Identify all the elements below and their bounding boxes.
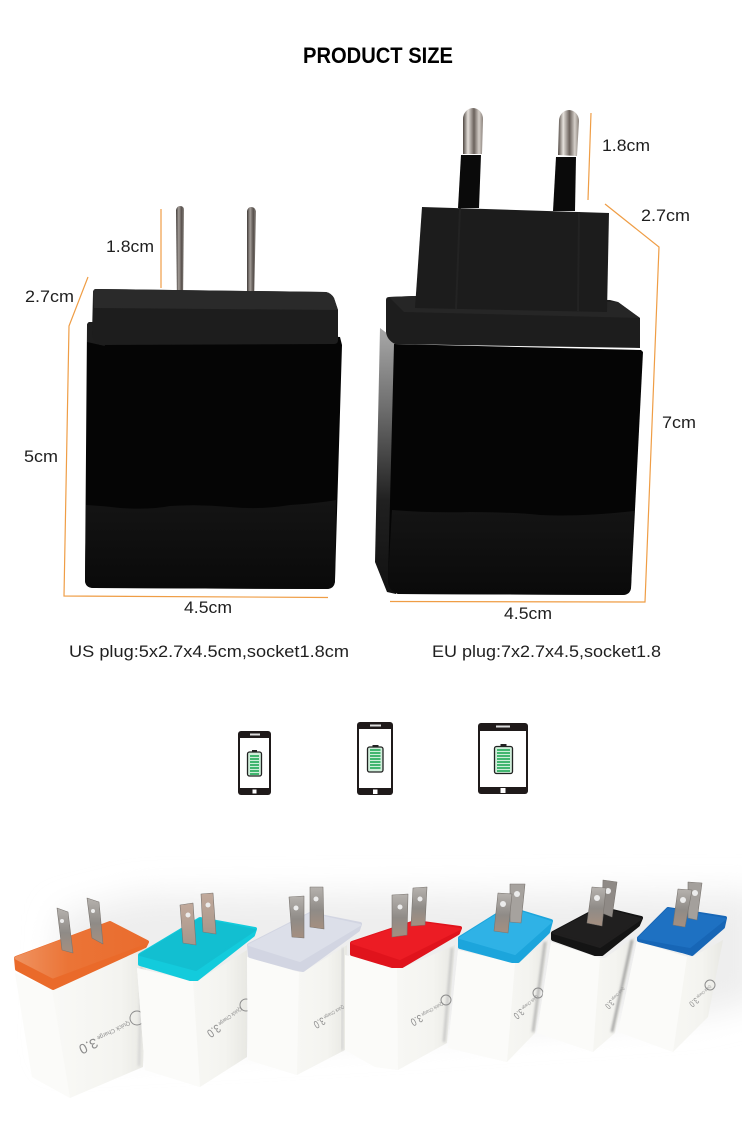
US pins [176,206,256,304]
icon: tablet charging [478,723,528,794]
EU lower reflection [388,510,634,595]
EU dimension labels: 4.5cm [504,604,552,623]
US body [85,322,342,589]
EU plug caption: EU plug:7x2.7x4.5,socket1.8 [432,642,661,661]
charger: black: Quick Charge 3.0 [603,986,629,1011]
EU pins [458,108,579,211]
charger: blue: Quick Charge 3.0 [687,983,715,1009]
US dimension labels: 1.8cm [106,237,154,256]
EU socket block [415,207,609,312]
charger: red: Quick Charge 3.0 [408,999,446,1028]
charger: black [537,880,641,1052]
US shoulder [87,322,105,346]
charger: teal: Quick Charge 3.0 [204,1005,246,1041]
charger: orange: Quick Charge 3.0 [76,1018,135,1058]
EU dimension lines [390,113,659,602]
US cap [92,289,338,345]
charger: teal [137,893,255,1087]
US dimension labels: 4.5cm [184,598,232,617]
icon: small phone charging [238,731,271,795]
charger: silver: Quick Charge 3.0 [311,1002,348,1030]
photo: seven coloured chargers [15,880,750,1098]
US plug caption: US plug:5x2.7x4.5cm,socket1.8cm [69,642,349,661]
charger: light blue: Quick Charge 3.0 [511,993,542,1021]
icon: medium phone charging [357,722,393,795]
US plug charger photo [85,206,342,589]
title: PRODUCT SIZE [303,43,453,68]
US dimension labels: 2.7cm [25,287,74,306]
US dimension labels: 5cm [24,447,58,466]
charger: orange [15,898,147,1098]
photo backdrop [55,892,750,1055]
US lower reflection [85,500,336,589]
EU shoulder cap [386,296,640,348]
EU dimension labels: 7cm [662,413,696,432]
EU body side strip [375,328,396,594]
US dimension labels [24,237,232,617]
charger: silver [247,887,360,1075]
charger: red [345,887,460,1070]
charger: blue [618,882,725,1052]
EU dimension labels: 2.7cm [641,206,690,225]
charger: light blue [448,884,551,1062]
EU dimension labels: 1.8cm [602,136,650,155]
US dimension lines [64,209,328,598]
EU dimension labels [504,136,696,623]
EU plug charger photo [375,108,643,595]
EU body [388,344,643,595]
